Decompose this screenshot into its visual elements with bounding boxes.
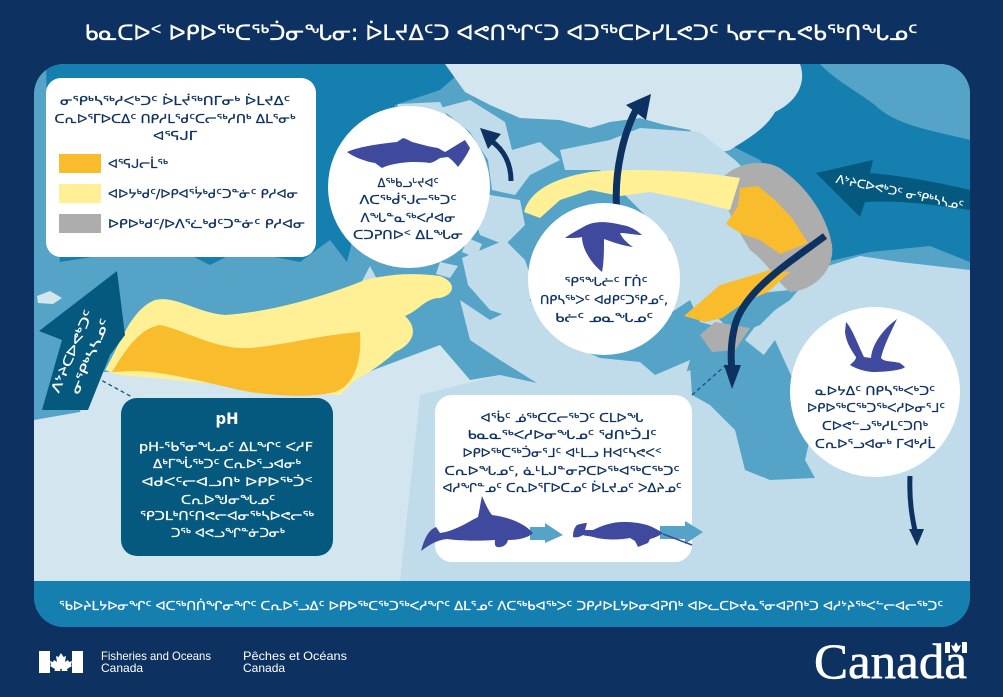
- Canada wordmark: Canada: [814, 633, 967, 689]
- panel: Greenland shark: [328, 106, 490, 268]
- seabird text: ᐅᑭᐅᖅᑕᖅᑐᖅᐸᓱᐅᓂᕐᒧᑦ: [807, 401, 945, 415]
- top right mid band: [820, 64, 970, 140]
- panel: whales: [421, 395, 703, 562]
- footer statement: ᖃᐅᔨᒪᔭᐅᓂᖏᑦ ᐊᑕᖅᑎᑏᖏᓂᖏᑦ ᑕᕆᐅᕐᓗᐃᑦ ᐅᑭᐅᖅᑕᖅᑐᖅᐸᓱᖏᑦ ᐃᒪᕐᓄᑦ ᐱᑕᖅᑲᐊᖅᐳᑦ ᑐᑭᓱᐅᒪᔭᐅᓂᐊᕈᑎᒃ ᐊᐅᓚᑕᐅᔪᓇᕐᓂᐊᕈᑎᒃᑐ ᐊᓱᔾᔨᖅᐸᓪᓕᐊᓕᖅᑐᑦ: [59, 597, 943, 613]
- department name English: [101, 649, 211, 675]
- arrow: small north-west navy: [480, 128, 511, 181]
- arrow: south navy: [909, 476, 924, 546]
- icon: orca: [421, 496, 533, 551]
- title: ᑲᓇᑕᐅᑉ ᐅᑭᐅᖅᑕᖅᑑᓂᖓᓂ: ᐆᒪᔪᐃᑦᑐ ᐊᕙᑎᖏᑦᑐ ᐊᑐᖅᑕᐅᓯᒪᕙᑐᑦ ᓴᓂᓕᕆᕙᑲᖅᑎᖓᓄᑦ: [84, 19, 918, 45]
- shark text: ᐃᖅᑲᓗᒡᔪᐊᑦ: [378, 176, 438, 190]
- pH text: ᐃᒃᒥᖔᖅᑐᑦ ᑕᕆᐅᕐᓗᐊᓂᒃ: [153, 455, 301, 471]
- department name English: Canada: [101, 661, 143, 675]
- icon: Canadian flag: [39, 651, 83, 673]
- legend: year-round: ᐊᕐᕋᒍᓕᒫᖅ: [108, 155, 168, 171]
- icon: seabird: [845, 319, 905, 372]
- seasonal range: summer yellow west: [105, 274, 452, 395]
- arrow: orca direction: [530, 523, 563, 543]
- legend heading: [54, 92, 296, 143]
- dashed leader lines: [90, 365, 726, 397]
- panel: pH: [121, 398, 333, 556]
- legend heading: ᑕᕆᐅᕐᒥᐅᑕᐃᑦ ᑎᑭᓱᒪᖁᑦᑕᓕᖅᓱᑎᒃ ᐃᒪᕐᓂᒃ: [54, 112, 296, 126]
- goose text: ᑎᑭᓴᖅᐳᑦ ᐊᑯᑭᑦᑐᕿᓄᑦ,: [540, 293, 668, 307]
- seasonal range: winter grey east: [722, 163, 832, 292]
- whales text: ᑲᓇᓇᖅᐸᓱᐅᓂᖓᓄᑦ ᖁᑎᒃᑑᒧᑦ: [468, 426, 656, 442]
- legend: year-round: [59, 154, 168, 173]
- whales text: ᐅᑭᐅᖅᑕᖅᑑᓂᕐᒧᑦ ᐊᒻᒪᓗ ᕼᐊᑦᓴᕙᐸᑉ: [462, 444, 662, 460]
- shark text: ᑕᑐᕈᑎᐅᑉ ᐃᒪᖓᓂ: [353, 228, 463, 242]
- arctic islands: [360, 100, 810, 395]
- arrow: Atlantic inflow: ᐱᔾᔨᑕᐅᕙᒃᑐᑦ ᓂᕿᒃᓴᓴᓄᑦ: [835, 172, 965, 212]
- arrow: Pacific inflow: ᓂᕿᒃᓴᓴᓄᑦ: [67, 316, 112, 396]
- icon: goose: [565, 222, 642, 272]
- pH heading: pH: [216, 409, 238, 428]
- legend: winter and spring: ᐅᑭᐅᒃᑯᑦ/ᐅᐱᕐᓛᒃᑯᑦᑐᓐᓃᑦ ᑭᓱᐊᓂ: [108, 217, 305, 231]
- panel: seabird: [790, 307, 960, 477]
- goose text: ᑲᓖᑦ ᓄᓇᖓᓄᑦ: [555, 311, 653, 325]
- pH text: [139, 440, 314, 540]
- icon: wordmark flag: [945, 642, 967, 653]
- panel: geese: [528, 203, 680, 355]
- legend: summer and fall: ᐊᐅᔭᒃᑯᑦ/ᐅᑭᐊᕐᔮᒃᑯᑦᑐᓐᓃᑦ ᑭᓱᐊᓂ: [108, 185, 298, 201]
- seabird text: [807, 384, 945, 451]
- arrow: Pacific inflow: [39, 271, 125, 410]
- arrow: large north navy: [616, 94, 651, 215]
- pH text: pH-ᖃᕐᓂᖓᓄᑦ ᐃᒪᖏᑦ ᐸᓱF: [139, 440, 313, 454]
- small ice blob west: [37, 291, 62, 304]
- pH text: ᑐᖅ ᐊᕙᓗᖏᓐᓃᑐᓂᒃ: [171, 526, 285, 540]
- Quebec Labrador: [745, 256, 970, 472]
- legend heading: ᐊᕐᕋᒍᒥ: [153, 129, 197, 143]
- arrow: Pacific inflow: ᐱᔾᔨᑕᐅᕙᒃᑐᑦ: [48, 308, 96, 395]
- small grey patch: [700, 322, 750, 352]
- legend heading: ᓂᕿᒃᓴᖅᓱᐸᒃᑐᑦ ᐆᒪᔫᖅᑎᒥᓂᒃ ᐆᒪᔪᐃᑦ: [60, 92, 290, 108]
- goose text: [540, 273, 668, 325]
- whales text: ᐊᕐᑳᑦ ᓅᖅᑕᑕᓕᖅᑐᑦ ᑕᒪᐅᖓ: [480, 409, 644, 425]
- department name French: Canada: [243, 661, 285, 675]
- Hudson Bay: [690, 340, 815, 480]
- department name English: Fisheries and Oceans: [101, 649, 211, 663]
- year-round orange east: [726, 186, 808, 254]
- whales text: ᐊᓱᖏᓐᓄᑦ ᑕᕆᐅᕐᒥᐅᑕᓄᑦ ᐆᒪᔪᓄᑦ ᐳᐃᔨᓄᑦ: [442, 479, 682, 495]
- arrow: narwhal direction: [660, 521, 703, 544]
- seasonal range: yellow north Baffin: [524, 170, 740, 218]
- arrow: Baffin to Hudson navy: [724, 236, 825, 389]
- pH text: ᐊᑯᐸᑦᓕᐊᓗᑎᒃ ᐅᑭᐅᖅᑑᑉ: [142, 473, 312, 489]
- Greenland and high arctic land: [445, 64, 802, 152]
- seabird text: ᓇᐅᔭᐃᑦ ᑎᑭᓴᖅᐸᒃᑐᑦ: [815, 384, 935, 398]
- shark text: [353, 176, 463, 242]
- shark text: ᐱᖓᓐᓇᖅᐸᓱᐊᓂ: [360, 211, 456, 225]
- department name French: Pêches et Océans: [243, 649, 347, 663]
- deep ocean areas: [46, 64, 970, 265]
- icon: shark: [347, 138, 470, 168]
- pH text: ᕿᑐᒪᒃᑎᑦᑎᕙᓕᐊᓂᖅᓴᐅᕙᓕᖅ: [140, 509, 314, 523]
- pH text: ᑕᕆᐅᖑᓂᖓᓄᑦ: [181, 493, 275, 507]
- seabird text: ᑕᐅᕙᓪᓗᖅᓱᒪᑦᑐᑎᒃ: [822, 419, 928, 433]
- whales text: [442, 409, 682, 495]
- legend: summer and fall: [59, 184, 298, 203]
- shark text: ᐱᑕᖅᑰᕐᒍᓕᖅᑐᑦ: [360, 191, 456, 207]
- icon: narwhal: [573, 522, 692, 547]
- year-round orange west: [112, 325, 360, 396]
- goose text: ᕿᕐᖓᓖᑦ ᒥᑏᑦ: [564, 273, 648, 289]
- arrow: Atlantic inflow: [816, 160, 970, 217]
- whales text: ᑕᕆᐅᖓᓄᑦ, ᓈᒻᒪᒍᓐᓂᕈᑕᐅᖅᐊᖅᑕᖅᑐᑦ: [444, 464, 680, 478]
- map: [34, 64, 970, 627]
- mainland Alaska Yukon: [34, 345, 500, 581]
- bottom band: [34, 581, 970, 627]
- seabird text: ᑕᕆᐅᕐᓗᐊᓂᒃ ᒥᐊᒃᓱᒫ: [815, 435, 935, 451]
- department name French: [243, 649, 347, 675]
- panel: legend: [46, 78, 316, 257]
- mainland south: [400, 370, 970, 581]
- legend: winter and spring: [59, 214, 305, 233]
